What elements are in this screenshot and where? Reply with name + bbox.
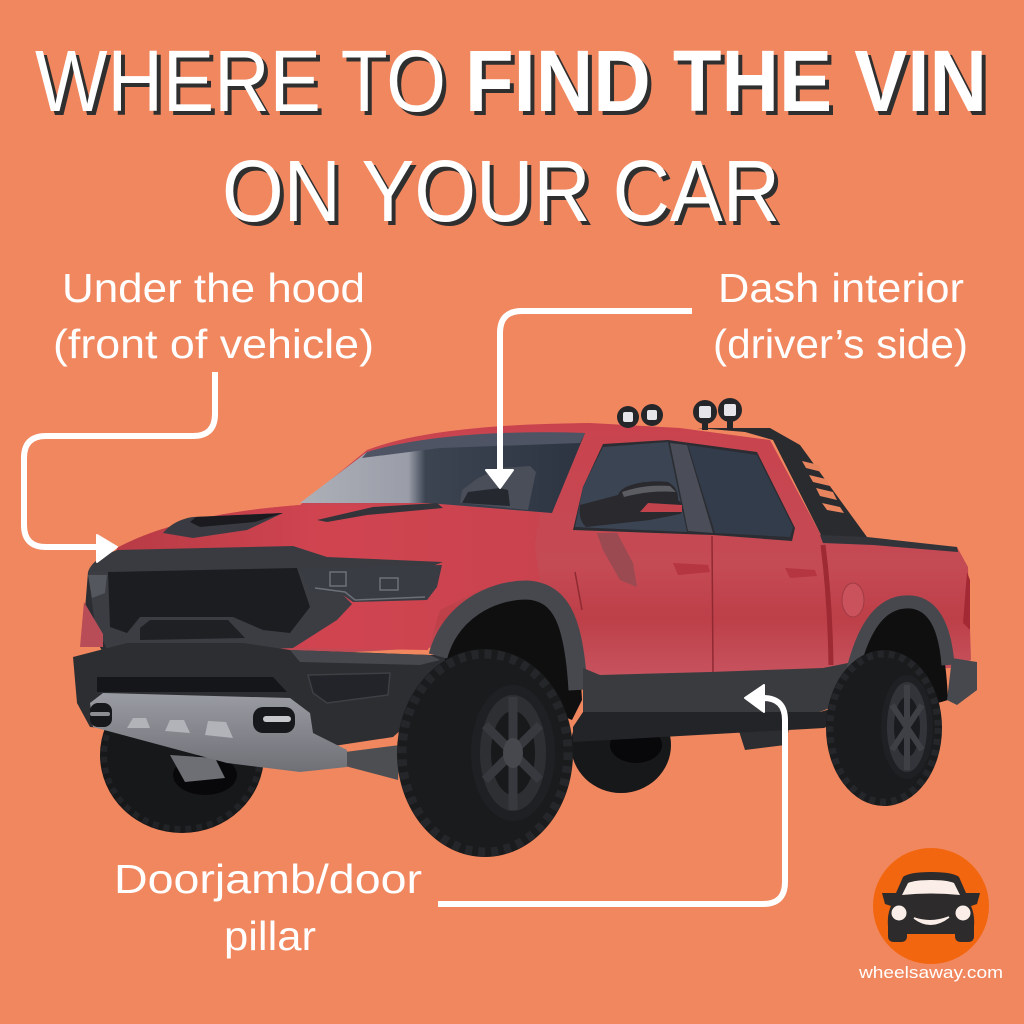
hood scoop — [163, 513, 283, 538]
title — [35, 33, 991, 244]
arrow: under the hood — [24, 372, 215, 562]
label: dash interior: Dash interior — [718, 265, 964, 311]
mirror red insert — [640, 503, 682, 512]
side mirror — [580, 481, 683, 527]
sport bar — [697, 428, 867, 537]
headlight — [300, 565, 442, 602]
seat back — [462, 488, 510, 506]
lower bumper grille — [97, 677, 287, 692]
front bumper — [73, 643, 450, 747]
title: ON YOUR CAR — [222, 143, 780, 240]
skid plate bumps — [127, 718, 233, 738]
skid plate left lamp — [90, 703, 112, 727]
front door window — [575, 442, 687, 532]
cowl vent — [317, 503, 443, 522]
cab and bed gap — [823, 545, 831, 665]
far front wheel — [100, 677, 264, 833]
rear door window — [688, 445, 793, 537]
left headlight — [88, 575, 107, 598]
logo: wheelsaway — [858, 848, 1003, 982]
door handle rear — [785, 568, 817, 578]
title: WHERE TO — [39, 37, 450, 134]
door handle front — [673, 563, 710, 575]
arrow: doorjamb — [438, 685, 785, 904]
grille — [108, 568, 310, 633]
illustration: red pickup truck — [73, 398, 977, 857]
tail light — [963, 572, 970, 630]
door seams — [575, 536, 831, 672]
front wheel arch flare — [438, 590, 578, 690]
title: FIND THE VIN — [465, 33, 987, 130]
skid plate — [90, 693, 347, 772]
fuel door — [842, 583, 864, 617]
title: WHERE TO — [35, 33, 446, 130]
step bar — [573, 704, 850, 742]
label: under the hood: (front of vehicle) — [53, 321, 374, 367]
front seat — [460, 466, 536, 510]
bed cover — [820, 535, 958, 552]
rocker cladding — [583, 662, 853, 713]
hood — [100, 505, 540, 650]
rear wheel arch flare — [845, 602, 948, 706]
headlight lens detail — [315, 572, 425, 600]
mirror highlight — [622, 486, 676, 497]
far rear wheel — [571, 697, 671, 793]
door pillar — [670, 443, 713, 533]
rear wheel arch interior — [850, 608, 948, 720]
label: dash interior: (driver’s side) — [713, 321, 968, 367]
fog light — [308, 673, 390, 703]
front wheel arch interior — [445, 597, 582, 720]
roof lights — [617, 398, 742, 430]
label: doorjamb: Doorjamb/door — [114, 856, 422, 902]
title: FIND THE VIN — [469, 37, 991, 134]
title: ON YOUR CAR — [226, 147, 784, 244]
skid plate right lamp — [253, 707, 295, 733]
side windows frame — [573, 440, 795, 541]
label: under the hood: Under the hood — [62, 265, 365, 311]
lower grille opening — [140, 620, 245, 640]
truck body — [100, 423, 971, 684]
mirror shadow on door — [597, 533, 637, 587]
front side edge — [84, 572, 130, 652]
arrow: dash interior — [486, 311, 692, 488]
windshield roof band — [362, 432, 585, 458]
website: wheelsaway.com — [858, 963, 1003, 982]
hood lip — [88, 546, 443, 572]
label: dash interior — [713, 265, 968, 367]
label: doorjamb: pillar — [224, 913, 316, 959]
bumper highlight — [290, 650, 440, 665]
suspension and underbody — [170, 725, 790, 782]
left corner panel — [80, 602, 103, 647]
rear wheel — [826, 650, 942, 806]
label: under the hood — [53, 265, 374, 367]
hood scoop opening — [190, 513, 283, 527]
windshield — [300, 433, 585, 513]
icon: smiling car — [882, 872, 980, 942]
label: doorjamb — [114, 856, 422, 959]
front fascia — [88, 566, 352, 655]
rear bumper — [947, 658, 977, 705]
front wheel — [397, 649, 573, 857]
